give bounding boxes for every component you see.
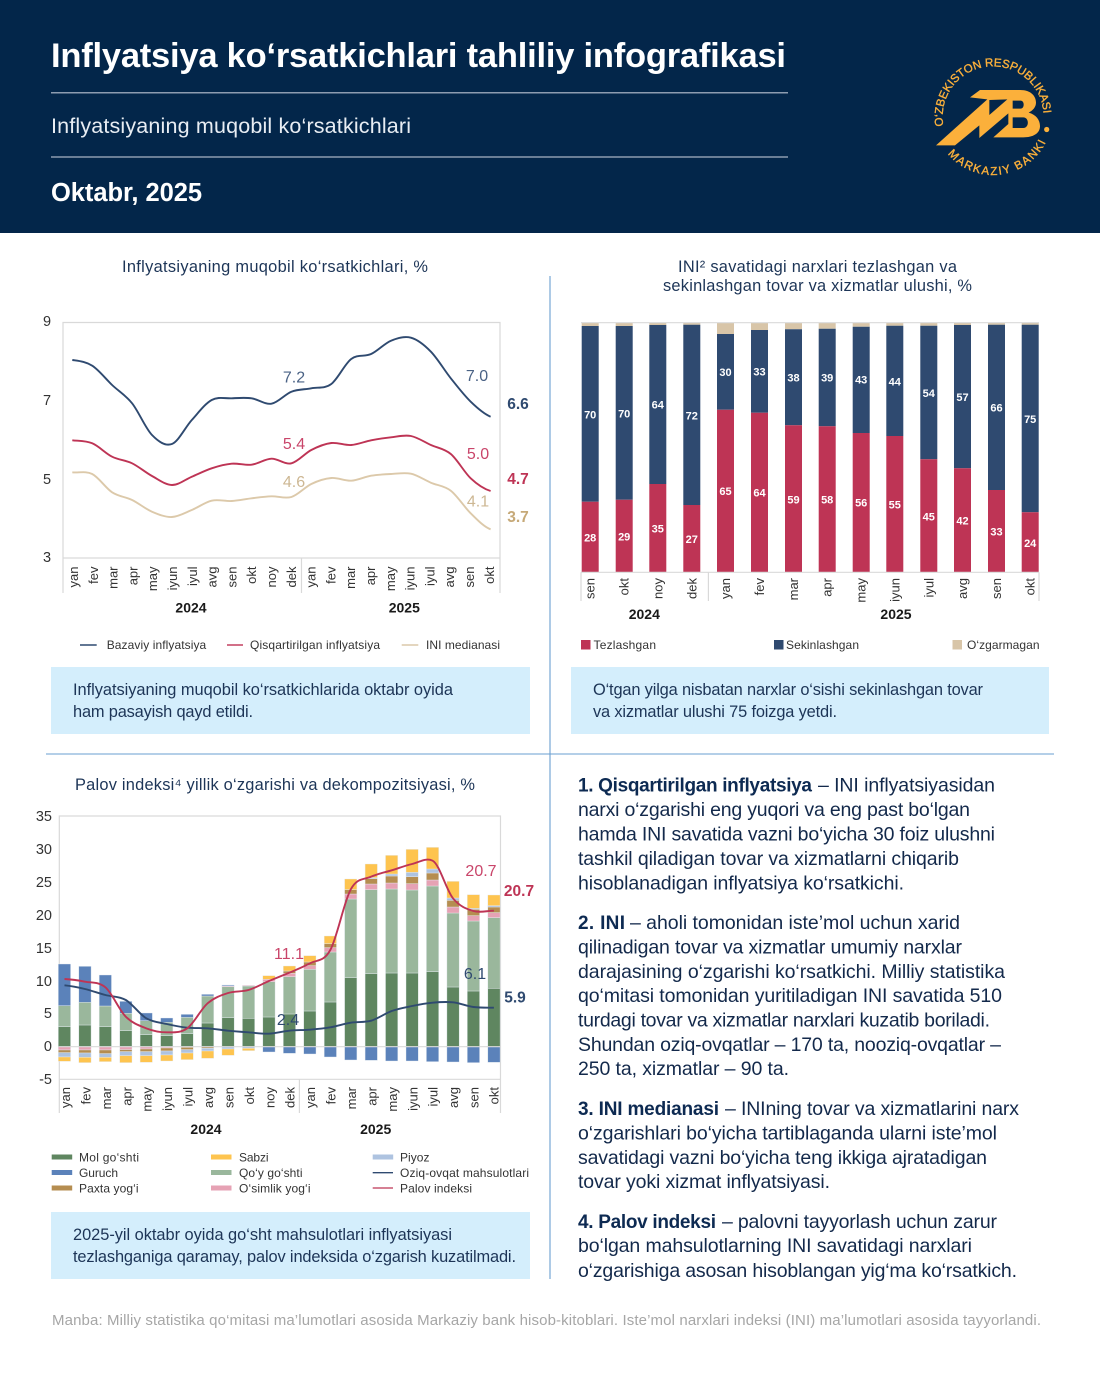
title: Inflyatsiya ko‘rsatkichlari tahliliy infografikasi	[51, 37, 786, 75]
legend: palov index: Palov indeksi	[400, 1182, 472, 1196]
text block: INI definition: turdagi tovar va xizmatlar narxlari kuzatib boriladi.	[578, 1010, 990, 1032]
value labels: slowing: 54	[923, 388, 936, 400]
text block: palov index definition: bo‘lgan mahsulotlarning INI savatidagi narxlari	[578, 1235, 972, 1257]
callout: palov index: 2025-yil oktabr oyida go‘sht mahsulotlari inflyatsiyasi	[73, 1226, 452, 1244]
y axis labels: 35	[36, 809, 52, 825]
month labels: fev	[86, 566, 101, 584]
callout: price change shares	[571, 667, 1049, 734]
month labels: iyun	[887, 578, 902, 602]
month labels: noy	[650, 578, 665, 599]
text block: INI definition: Shundan oziq-ovqatlar – 170 ta, nooziq-ovqatlar –	[578, 1034, 1001, 1056]
month labels: dek	[283, 1087, 298, 1108]
month labels: sen	[467, 1087, 482, 1108]
month labels: iyun	[160, 1087, 175, 1111]
combo chart: palov index decomposition: 5.9	[504, 990, 526, 1007]
callout: alternative indicators: Inflyatsiyaning muqobil ko‘rsatkichlarida oktabr oyida	[73, 681, 454, 699]
value labels: slowing: 39	[821, 373, 833, 385]
legend: palov index: Qo‘y go‘shti	[239, 1166, 302, 1180]
legend: price change shares: Sekinlashgan	[786, 638, 859, 652]
line chart: alternative inflation indicators: 7	[43, 393, 51, 409]
combo chart: palov index decomposition	[36, 809, 534, 1137]
y axis labels	[36, 809, 52, 1088]
stacked bar chart: price change shares: 2024	[629, 606, 660, 622]
y axis labels: -5	[39, 1072, 52, 1088]
month labels: dek	[284, 566, 299, 587]
legend: palov index	[52, 1150, 529, 1196]
series: slowing	[582, 325, 1039, 512]
icon: central bank logo	[934, 58, 1052, 176]
line: food products	[64, 985, 494, 1034]
month labels: sen	[221, 1087, 236, 1108]
legend: price change shares: O‘zgarmagan	[967, 638, 1040, 652]
line chart: alternative inflation indicators: 2025	[389, 600, 420, 616]
month labels: yan	[66, 566, 81, 587]
series: unchanged	[582, 323, 1039, 334]
value labels: slowing: 64	[652, 400, 665, 412]
value labels: slowing: 44	[889, 376, 902, 388]
month labels: mar	[344, 1086, 359, 1109]
month labels: noy	[264, 566, 279, 587]
month labels: iyul	[921, 578, 936, 598]
month labels	[66, 566, 497, 591]
chart title: share of goods with accelerating and slowing prices: sekinlashgan tovar va xizmatlar ulushi, %	[663, 277, 972, 295]
month labels: okt	[482, 566, 497, 584]
y axis labels: 25	[36, 875, 52, 891]
series: vegetable oil	[58, 880, 500, 1050]
month labels: may	[140, 1087, 155, 1112]
month labels: iyul	[426, 1087, 441, 1107]
month labels: avg	[955, 578, 970, 599]
month labels: okt	[486, 1087, 502, 1104]
text block: trimmed inflation definition: hamda INI savatida vazni bo‘yicha 30 foiz ulushni	[578, 824, 995, 846]
text block: INI definition: 250 ta, xizmatlar – 90 ta.	[578, 1058, 789, 1080]
header banner	[0, 0, 1100, 233]
month labels: yan	[58, 1087, 73, 1108]
series: beef	[58, 972, 500, 1047]
month labels: avg	[446, 1087, 461, 1108]
value labels: accelerating: 64	[753, 487, 766, 499]
value labels: slowing: 43	[855, 375, 867, 387]
combo chart: palov index decomposition: 11.1	[274, 946, 304, 963]
value labels: accelerating: 28	[584, 532, 596, 544]
month labels: apr	[364, 1086, 380, 1106]
line chart: alternative inflation indicators: 5	[43, 472, 51, 488]
value labels: accelerating	[584, 486, 1037, 550]
series: accelerating	[582, 410, 1039, 572]
month labels: fev	[323, 566, 338, 584]
text block: INI definition: 2. INI	[578, 913, 625, 934]
combo chart: palov index decomposition: 2025	[360, 1121, 391, 1137]
text block: INI definition	[578, 912, 1005, 1080]
month labels: iyun	[405, 1087, 420, 1111]
month labels: apr	[119, 1086, 134, 1106]
value labels: accelerating: 55	[889, 499, 901, 511]
value labels: slowing: 70	[584, 409, 596, 421]
text block: INI median definition	[578, 1098, 1019, 1193]
text block: trimmed inflation definition: narxi o‘zgarishi eng yuqori va eng past bo‘lgan	[578, 799, 970, 821]
combo chart: palov index decomposition: 2.4	[277, 1012, 299, 1029]
series: mutton	[58, 886, 500, 1036]
legend: palov index: Guruch	[79, 1166, 118, 1180]
source note: Manba: Milliy statistika qo‘mitasi ma’lumotlari asosida Markaziy bank hisob-kitoblari. Iste’mol narxlari indeksi (INI) ma’lumotlari asosida tayyorlandi.	[52, 1312, 1041, 1329]
legend: palov index: Piyoz	[400, 1150, 430, 1164]
legend: price change shares: Tezlashgan	[594, 638, 656, 652]
month labels: avg	[205, 566, 220, 587]
value labels: accelerating: 35	[652, 524, 664, 536]
text block: trimmed inflation definition: hisoblanadigan inflyatsiya ko‘rsatkichi.	[578, 872, 904, 894]
legend: alternative indicators	[80, 638, 500, 652]
text block: palov index definition: – palovni tayyorlash uchun zarur	[722, 1211, 998, 1233]
month labels: yan	[304, 566, 319, 587]
text block: palov index definition: o‘zgarishiga asosan hisoblangan yig‘ma ko‘rsatkich.	[578, 1260, 1017, 1282]
month labels: noy	[262, 1087, 277, 1108]
month labels	[583, 577, 1038, 603]
text block: INI definition: qilinadigan tovar va xizmatlar umumiy narxlar	[578, 936, 962, 958]
month labels: okt	[244, 566, 259, 584]
icon: central bank logo: O‘ZBEKISTON RESPUBLIKASI	[934, 58, 1052, 126]
chart title: alternative indicators: Inflyatsiyaning muqobil ko‘rsatkichlari, %	[122, 258, 428, 276]
month labels: avg	[442, 566, 457, 587]
value labels: slowing: 30	[719, 367, 732, 379]
chart title: share of goods with accelerating and slowing prices	[663, 258, 972, 295]
value labels: accelerating: 59	[787, 494, 800, 506]
line chart: alternative inflation indicators: 7.2	[283, 370, 305, 387]
callout: alternative indicators: ham pasayish qayd etildi.	[73, 703, 253, 721]
y axis labels: 20	[36, 908, 52, 924]
combo chart: palov index decomposition: 2024	[190, 1121, 222, 1137]
line chart: alternative inflation indicators: 7.0	[466, 368, 488, 385]
subtitle: Inflyatsiyaning muqobil ko‘rsatkichlari	[51, 114, 411, 138]
text block: trimmed inflation definition	[578, 774, 995, 894]
legend: alternative indicators: INI medianasi	[426, 638, 500, 652]
value labels: accelerating: 24	[1024, 538, 1037, 550]
series: onion	[58, 869, 500, 1057]
callout: palov index	[51, 1212, 530, 1279]
month labels: iyun	[165, 566, 180, 590]
month labels: apr	[125, 566, 140, 585]
legend: palov index: Paxta yog‘i	[79, 1182, 138, 1196]
line chart: alternative inflation indicators: 4.6	[283, 474, 305, 491]
value labels: accelerating: 45	[923, 512, 935, 524]
line chart: alternative inflation indicators: 4.7	[507, 471, 529, 488]
line chart: alternative inflation indicators	[43, 314, 529, 616]
month labels: may	[854, 578, 869, 603]
value labels: slowing: 72	[686, 410, 698, 422]
text block: INI definition: darajasining o‘zgarishi ko‘rsatkichi. Milliy statistika	[578, 961, 1005, 983]
month labels: mar	[343, 566, 358, 589]
month labels: avg	[201, 1087, 216, 1108]
text block: INI median definition: o‘zgarishlari bo‘yicha tartiblaganda ularni iste’mol	[578, 1122, 997, 1144]
month labels: sen	[462, 566, 477, 587]
month labels: okt	[1023, 578, 1038, 595]
series: cottonseed oil	[58, 873, 500, 1054]
month labels: may	[145, 566, 160, 591]
line: trimmed inflation	[72, 436, 491, 491]
icon: central bank logo: MARKAZIY BANKI	[948, 139, 1046, 176]
month labels: iyun	[403, 566, 418, 590]
value labels: accelerating: 42	[956, 515, 969, 527]
stacked bar chart: price change shares: 2025	[880, 606, 912, 622]
y axis labels: 10	[36, 974, 52, 990]
legend: palov index: Oziq-ovqat mahsulotlari	[400, 1166, 529, 1180]
legend: alternative indicators: Qisqartirilgan inflyatsiya	[250, 638, 380, 652]
value labels: slowing: 33	[753, 366, 766, 378]
line: palov index	[64, 860, 494, 1032]
value labels: accelerating: 33	[990, 526, 1003, 538]
stacked bars	[58, 847, 501, 1063]
month labels: may	[383, 566, 398, 591]
chart title: palov index: Palov indeksi⁴ yillik o‘zgarishi va dekompozitsiyasi, %	[75, 776, 475, 794]
month labels: may	[385, 1087, 400, 1112]
value labels: accelerating: 56	[855, 498, 867, 510]
callout: alternative indicators	[51, 667, 530, 734]
series: carrot	[58, 847, 500, 1063]
callout: palov index: tezlashganiga qaramay, palov indeksida o‘zgarish kuzatilmadi.	[73, 1248, 516, 1266]
month labels: fev	[78, 1087, 93, 1104]
text block: INI definition: qo‘mitasi tomonidan yuritiladigan INI savatida 510	[578, 985, 1002, 1007]
callout: price change shares: O‘tgan yilga nisbatan narxlar o‘sishi sekinlashgan tovar	[593, 681, 984, 699]
month labels: dek	[684, 578, 699, 599]
line chart: alternative inflation indicators: 6.6	[507, 396, 529, 413]
legend: palov index: Mol go‘shti	[79, 1150, 139, 1164]
value labels: slowing: 38	[787, 373, 800, 385]
series: rice	[58, 964, 500, 1063]
line chart: alternative inflation indicators: 2024	[175, 600, 207, 616]
month labels: iyul	[185, 566, 200, 586]
month labels: mar	[106, 566, 121, 589]
month labels: apr	[820, 577, 835, 597]
line chart: alternative inflation indicators: 4.1	[467, 494, 489, 511]
line chart: alternative inflation indicators: 5.4	[283, 436, 305, 453]
text block: INI median definition: – INIning tovar va xizmatlarini narx	[725, 1098, 1019, 1120]
month labels: sen	[989, 578, 1004, 599]
text block: palov index definition	[578, 1211, 1017, 1282]
callout: price change shares: va xizmatlar ulushi 75 foizga yetdi.	[593, 703, 837, 721]
line: base inflation	[72, 337, 491, 445]
value labels: accelerating: 65	[719, 486, 732, 498]
month labels: sen	[224, 566, 239, 587]
value labels: slowing: 66	[990, 403, 1003, 415]
month labels: mar	[786, 577, 801, 600]
value labels: accelerating: 29	[618, 531, 630, 543]
legend: palov index: O‘simlik yog‘i	[239, 1182, 310, 1196]
month labels: apr	[363, 566, 378, 585]
line chart: alternative inflation indicators: 5.0	[467, 446, 489, 463]
chart title: share of goods with accelerating and slowing prices: INI² savatidagi narxlari tezlashgan va	[678, 258, 958, 276]
month labels: fev	[752, 578, 767, 595]
legend: alternative indicators: Bazaviy inflyatsiya	[107, 638, 207, 652]
combo chart: palov index decomposition: 6.1	[464, 966, 486, 983]
month labels: okt	[617, 578, 632, 595]
month labels: mar	[99, 1086, 114, 1109]
value labels: slowing	[584, 366, 1036, 426]
line chart: alternative inflation indicators: 3.7	[507, 509, 529, 526]
line: CPI median	[72, 472, 491, 529]
month labels: yan	[303, 1087, 318, 1108]
text block: INI median definition: 3. INI medianasi	[578, 1099, 719, 1120]
value labels: slowing: 70	[618, 408, 630, 420]
value labels: accelerating: 58	[821, 495, 833, 507]
combo chart: palov index decomposition: 20.7	[504, 883, 534, 900]
text block: trimmed inflation definition: 1. Qisqartirilgan inflyatsiya	[578, 776, 812, 796]
month labels: iyul	[422, 566, 437, 586]
value labels: accelerating: 27	[686, 534, 698, 546]
month labels: iyul	[181, 1087, 196, 1107]
legend: price change shares	[581, 638, 1040, 652]
y axis labels: 5	[44, 1006, 52, 1022]
y axis labels: 15	[36, 941, 52, 957]
combo chart: palov index decomposition: 20.7	[465, 863, 497, 880]
text block: INI median definition: tovar yoki xizmat inflyatsiyasi.	[578, 1171, 830, 1193]
month labels: yan	[718, 578, 733, 599]
stacked bar chart: price change shares	[581, 323, 1039, 622]
line chart: alternative inflation indicators: 3	[43, 550, 51, 566]
text block: trimmed inflation definition: tashkil qiladigan tovar va xizmatlarni chiqarib	[578, 848, 959, 870]
value labels: slowing: 57	[956, 392, 969, 404]
y axis labels: 30	[36, 842, 52, 858]
month labels	[58, 1086, 502, 1112]
value labels: slowing: 75	[1024, 414, 1036, 426]
legend: palov index: Sabzi	[239, 1150, 268, 1164]
y axis labels: 0	[44, 1039, 52, 1055]
line chart: alternative inflation indicators: 9	[43, 314, 51, 330]
month labels: okt	[242, 1087, 257, 1104]
date: Oktabr, 2025	[51, 179, 202, 207]
text block: palov index definition: 4. Palov indeksi	[578, 1212, 716, 1233]
text block: INI median definition: savatidagi vazni bo‘yicha teng ikkiga ajratadigan	[578, 1147, 987, 1169]
text block: trimmed inflation definition: – INI inflyatsiyasidan	[818, 774, 995, 796]
text block: INI definition: – aholi tomonidan iste’mol uchun xarid	[630, 912, 960, 934]
month labels: sen	[583, 578, 598, 599]
month labels: fev	[324, 1087, 339, 1104]
